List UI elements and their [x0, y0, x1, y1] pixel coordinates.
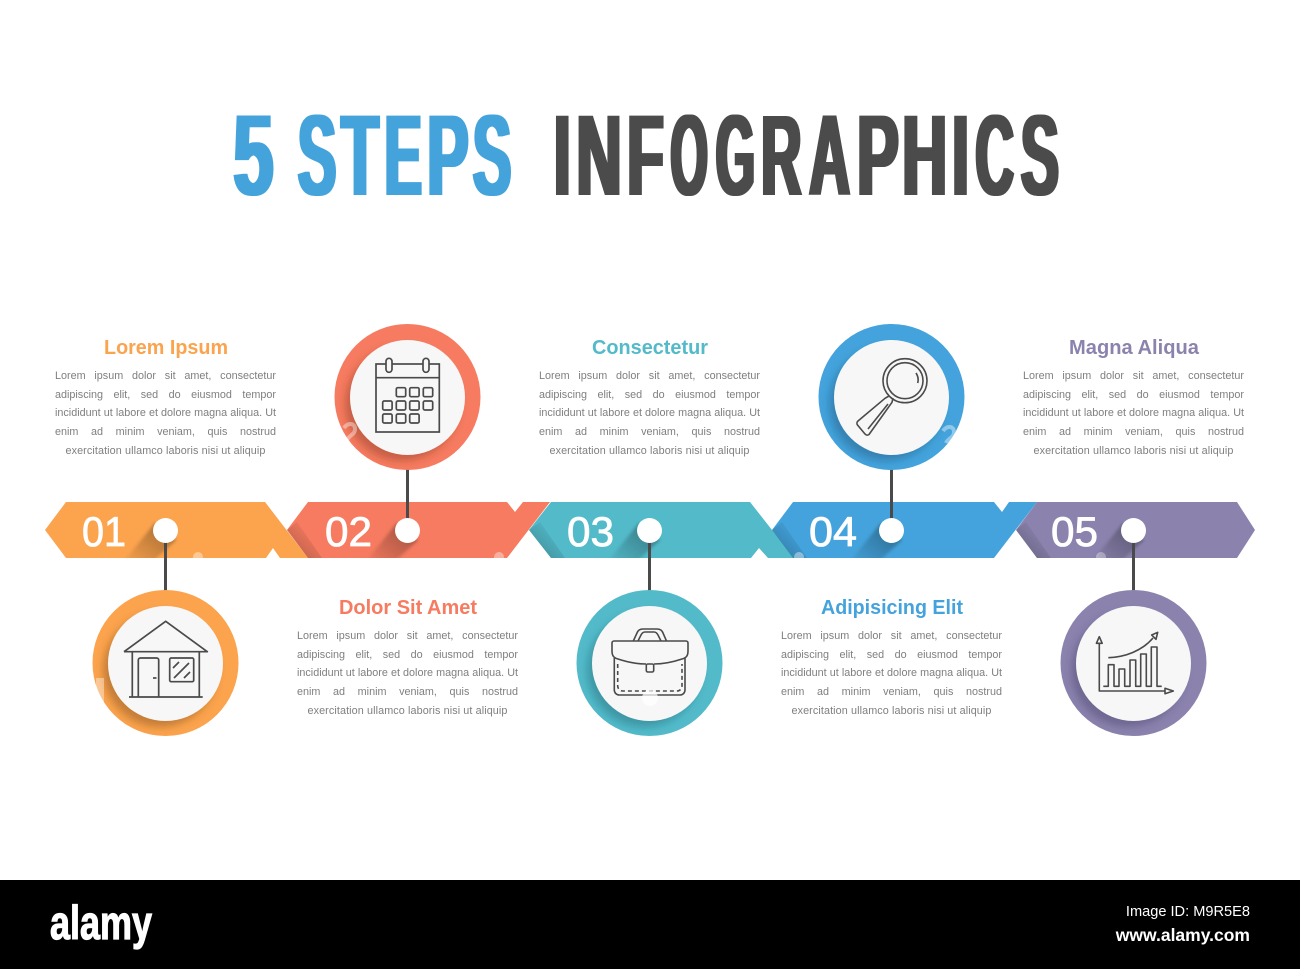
- ribbon 05: [1016, 502, 1255, 562]
- ribbon 03: [529, 502, 794, 558]
- text block: step 1: adipiscing elit, sed do eiusmod tempor: [55, 389, 276, 401]
- step numbers: 02: [325, 508, 372, 555]
- text block: step 5: incididunt ut labore et dolore magna aliqua. Ut: [1023, 407, 1244, 419]
- text block: step 3: enim ad minim veniam, quis nostrud: [539, 426, 760, 438]
- title: G: [716, 92, 755, 220]
- timeline dots: [153, 518, 1146, 543]
- title: P: [857, 92, 899, 220]
- text block: step 2: [297, 630, 518, 717]
- step numbers: 03: [567, 508, 614, 555]
- text block: step 3: exercitation ullamco laboris nisi ut aliquip: [549, 445, 750, 457]
- title: N: [576, 92, 622, 220]
- title: O: [671, 92, 708, 220]
- step numbers: [82, 508, 1098, 555]
- text block: step 4: [781, 630, 1002, 717]
- text block: step 1: exercitation ullamco laboris nisi ut aliquip: [65, 445, 266, 457]
- step numbers: 01: [82, 508, 126, 555]
- circle 04 with magnifier icon: [818, 324, 964, 470]
- circle 05 with chart icon: [1060, 590, 1206, 736]
- footer bar: www.alamy.com: [1115, 925, 1250, 945]
- title: 5: [233, 92, 274, 220]
- connector stems: [166, 469, 1134, 591]
- text block: step 5: enim ad minim veniam, quis nostrud: [1023, 426, 1244, 438]
- text block: step 4: exercitation ullamco laboris nisi ut aliquip: [791, 705, 992, 717]
- title: [233, 92, 1059, 220]
- text block: step 3: adipiscing elit, sed do eiusmod tempor: [539, 389, 760, 401]
- ribbon 01: [45, 502, 308, 562]
- circle 01 with house icon: [92, 590, 238, 736]
- ribbon 04: [772, 502, 1037, 562]
- title: S: [473, 92, 511, 220]
- text: S: [1021, 92, 1059, 220]
- footer bar: [0, 880, 1300, 969]
- text block: step 3: incididunt ut labore et dolore magna aliqua. Ut: [539, 407, 760, 419]
- text block: step 2: Lorem ipsum dolor sit amet, consectetur: [297, 630, 518, 642]
- step numbers: 04: [809, 508, 857, 555]
- long shadows of dots: [128, 522, 1144, 558]
- circle 02 with calendar icon: [334, 324, 480, 470]
- title: E: [385, 92, 422, 220]
- title: I: [952, 92, 969, 220]
- title: T: [341, 92, 379, 220]
- title: A: [809, 92, 850, 220]
- icon: magnifier: [857, 359, 927, 435]
- text block: step 1: enim ad minim veniam, quis nostrud: [55, 426, 276, 438]
- heading: Dolor Sit Amet: Dolor Sit Amet: [339, 597, 477, 619]
- icon: calendar: [376, 358, 439, 432]
- step numbers: 05: [1051, 508, 1098, 555]
- text block: step 3: [539, 370, 760, 457]
- title: S: [298, 92, 336, 220]
- title: F: [627, 92, 664, 220]
- heading: Consectetur: Consectetur: [592, 337, 708, 359]
- text block: step 5: adipiscing elit, sed do eiusmod tempor: [1023, 389, 1244, 401]
- footer bar: alamy: [50, 896, 152, 949]
- text block: step 4: adipiscing elit, sed do eiusmod tempor: [781, 649, 1002, 661]
- text block: step 5: [1023, 370, 1244, 457]
- timeline ribbon: [45, 502, 1255, 558]
- text block: step 4: Lorem ipsum dolor sit amet, consectetur: [781, 630, 1002, 642]
- icon: house: [124, 621, 207, 697]
- footer bar: Image ID: M9R5E8: [1126, 904, 1250, 920]
- heading: Adipisicing Elit: Adipisicing Elit: [821, 597, 963, 619]
- text block: step 2: incididunt ut labore et dolore magna aliqua. Ut: [297, 667, 518, 679]
- icon: growth chart: [1096, 632, 1173, 694]
- text block: step 1: incididunt ut labore et dolore magna aliqua. Ut: [55, 407, 276, 419]
- title: C: [976, 92, 1014, 220]
- title: I: [554, 92, 570, 220]
- text block: step 2: enim ad minim veniam, quis nostrud: [297, 686, 518, 698]
- heading: Lorem Ipsum: Lorem Ipsum: [104, 337, 228, 359]
- text block: step 3: Lorem ipsum dolor sit amet, consectetur: [539, 370, 760, 382]
- title: R: [761, 92, 802, 220]
- heading: Magna Aliqua: Magna Aliqua: [1069, 337, 1200, 359]
- text block: step 2: adipiscing elit, sed do eiusmod tempor: [297, 649, 518, 661]
- circle 03 with briefcase icon: [576, 590, 722, 736]
- title: H: [902, 92, 947, 220]
- text block: step 5: exercitation ullamco laboris nisi ut aliquip: [1033, 445, 1234, 457]
- title: P: [427, 92, 468, 220]
- text block: step 1: [55, 370, 276, 457]
- icon: briefcase: [612, 629, 688, 695]
- ribbon 02: [287, 502, 550, 562]
- text block: step 4: enim ad minim veniam, quis nostrud: [781, 686, 1002, 698]
- text block: step 1: Lorem ipsum dolor sit amet, consectetur: [55, 370, 276, 382]
- text block: step 2: exercitation ullamco laboris nisi ut aliquip: [307, 705, 508, 717]
- text block: step 5: Lorem ipsum dolor sit amet, consectetur: [1023, 370, 1244, 382]
- text block: step 4: incididunt ut labore et dolore magna aliqua. Ut: [781, 667, 1002, 679]
